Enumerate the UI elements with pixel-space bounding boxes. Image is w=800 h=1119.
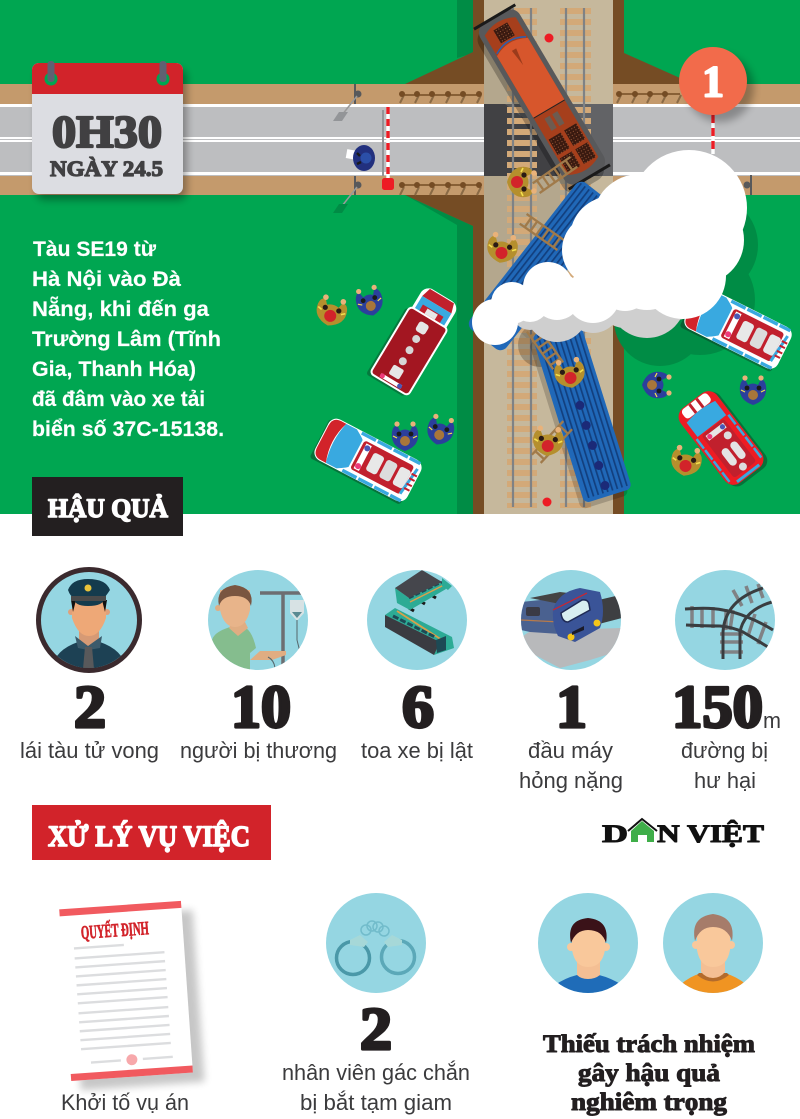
block: arrested crossing keepers [282,893,470,1115]
calendar: NGÀY 24.5 [50,156,163,181]
red rescue truck [366,282,461,398]
rescue workers [313,167,766,478]
caption: nghiêm trọng [571,1089,728,1116]
label: đường bị [681,738,768,763]
heading: Xử lý vụ việc [32,805,271,860]
red signal dots [542,34,554,506]
icon: handcuffs [326,893,426,993]
green ground [0,0,800,514]
cloud shadow [518,195,758,367]
intro text [32,238,224,441]
smoke cloud [472,150,747,345]
heading: Hậu quả: HẬU QUẢ [48,494,168,523]
calendar [32,61,187,200]
number with unit: 150 [672,674,763,740]
number: 10 [231,674,291,740]
ladders [520,157,577,463]
label [519,738,623,793]
stat: injured [180,570,337,763]
label: đầu máy [528,738,613,763]
intro text: biển số 37C-15138. [32,418,224,441]
caption: gây hậu quả [578,1060,721,1087]
label: người bị thương [180,738,337,763]
stat: train drivers killed [20,570,159,763]
intro text: Hà Nội vào Đà [32,268,181,291]
icon: overturned train [367,570,467,670]
ambulance right [679,284,795,374]
heading: Hậu quả [32,477,183,536]
number: 2 [360,996,392,1062]
logo: Dân Việt: D [602,821,628,848]
label: bị bắt tạm giam [300,1090,452,1115]
gate post right with number badge [679,47,754,195]
number with unit: m [763,708,781,733]
gate left [333,84,394,213]
icon: twisted rails [675,570,775,670]
label: toa xe bị lật [361,738,473,763]
number: 1 [556,674,587,740]
document sheet [59,900,205,1091]
locomotive [471,5,614,197]
label [282,1060,470,1115]
heading: Xử lý vụ việc: XỬ LÝ VỤ VIỆC [48,820,250,853]
icon: man with dark hair [538,893,638,1000]
number: 2 [74,674,106,740]
panel: accident scene [0,0,800,514]
gate post right with number badge: 1 [702,57,724,106]
icon: police driver [38,570,140,670]
label: lái tàu tử vong [20,738,159,763]
document sheet: QUYẾT ĐỊNH [80,917,150,944]
icon: wrecked locomotive [520,570,622,670]
policeman with document [346,145,375,171]
label [681,738,768,793]
logo: Dân Việt: N VIỆT [657,820,764,848]
blue coach bottom (derailed) [527,321,634,510]
intro text: đã đâm vào xe tải [32,388,205,411]
logo: Dân Việt [602,819,764,848]
intro text: Gia, Thanh Hóa) [32,358,196,381]
icon: injured patient [208,570,308,672]
stat: damaged locomotive [519,570,623,793]
label: Khởi tố vụ án [61,1090,189,1115]
number: 6 [402,674,434,740]
stat: overturned carriages [361,570,473,763]
label: hư hại [694,768,756,793]
ambulance bottom left [309,415,425,506]
road [0,84,800,195]
red car [674,385,771,492]
intro text: Tàu SE19 từ [33,238,157,261]
embankment shading [405,0,690,514]
blue coach top (derailed) [466,179,616,353]
fences [399,91,681,195]
railway tracks [507,8,591,508]
intro text: Nẵng, khi đến ga [32,297,209,321]
calendar: 0H30 [52,106,162,157]
stat: damaged track [672,570,781,793]
label: nhân viên gác chắn [282,1060,470,1085]
block: two responsible men [538,893,763,1116]
caption: Thiếu trách nhiệm [543,1031,755,1058]
railway bed and level crossing [484,0,613,514]
caption [543,1031,755,1116]
intro text: Trường Lâm (Tĩnh [32,328,221,351]
document: decision to prosecute [59,900,205,1115]
label: hỏng nặng [519,768,623,793]
icon: man with light brown hair [663,893,763,1000]
